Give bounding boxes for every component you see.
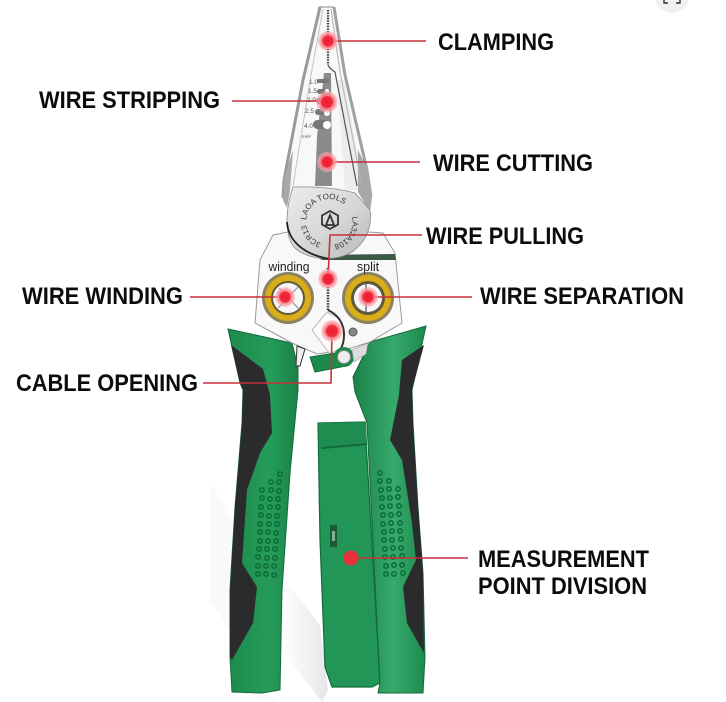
hex logo <box>322 211 338 229</box>
callout: wire cutting <box>317 150 593 177</box>
measurement box <box>318 422 380 687</box>
gauge labels: 1.5 <box>308 88 317 95</box>
plate band <box>313 254 396 260</box>
metal body <box>255 232 402 354</box>
callout: wire stripping <box>39 87 338 114</box>
winding ring <box>262 272 314 324</box>
label: measurement point division <box>478 546 649 600</box>
label: wire pulling: WIRE PULLING <box>426 223 584 250</box>
label: wire separation: WIRE SEPARATION <box>480 283 684 310</box>
label: measurement point division: POINT DIVISION <box>478 573 647 600</box>
pliers <box>227 6 427 694</box>
callout: cable opening <box>16 320 343 397</box>
winding label: winding <box>268 260 310 274</box>
gauge labels: 4.0 <box>304 123 313 130</box>
callout: wire pulling <box>318 223 584 289</box>
engraved steel grade: 3CR13 <box>301 226 320 248</box>
handle right <box>353 326 426 693</box>
label: cable opening: CABLE OPENING <box>16 370 198 397</box>
callout: measurement point division <box>344 546 649 600</box>
split label: split <box>357 260 380 274</box>
jaw <box>283 7 372 212</box>
engraved brand: LAOA TOOLS <box>300 194 346 220</box>
label: wire winding: WIRE WINDING <box>22 283 183 310</box>
grip right <box>390 345 424 653</box>
handle left <box>228 329 298 693</box>
grip left <box>230 345 272 660</box>
gauge labels: mm² <box>302 134 311 139</box>
label: wire cutting: WIRE CUTTING <box>433 150 593 177</box>
split ring <box>342 272 394 324</box>
wire stripping notches <box>313 79 331 129</box>
callout: wire separation <box>358 283 684 310</box>
gauge labels: 1.0 <box>309 79 318 86</box>
label: wire stripping: WIRE STRIPPING <box>39 87 220 114</box>
callout: clamping <box>318 29 554 56</box>
cable opening <box>312 310 357 354</box>
gauge labels <box>302 79 318 139</box>
callout: wire winding <box>22 283 295 310</box>
pulling teeth <box>327 268 329 310</box>
label: measurement point division: MEASUREMENT <box>478 546 649 573</box>
background shadows <box>210 483 328 702</box>
label: clamping: CLAMPING <box>438 29 554 56</box>
engraved model: LA32A108 <box>334 216 358 250</box>
gauge labels: 2.5 <box>305 108 314 115</box>
spring clasp <box>296 343 368 372</box>
top-right corner button <box>655 0 689 13</box>
dots left <box>256 472 282 577</box>
pivot plate <box>286 186 371 260</box>
gauge labels: 2.0 <box>307 97 316 104</box>
dots right <box>378 471 405 576</box>
